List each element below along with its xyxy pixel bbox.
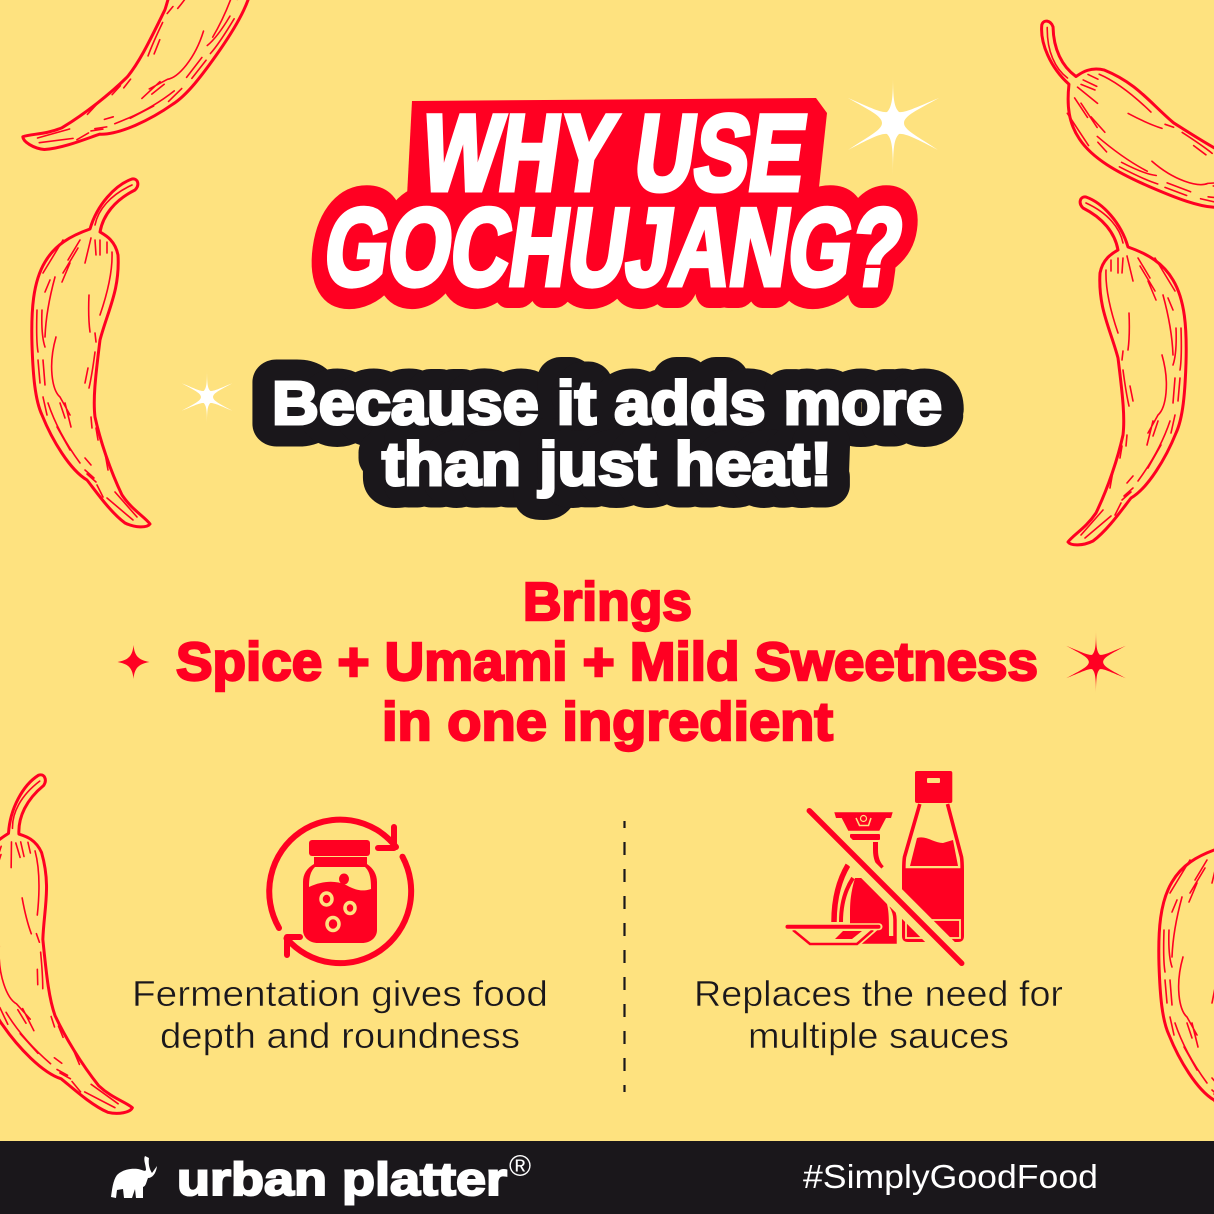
caption: fermentation: Fermentation gives food <box>132 973 548 1014</box>
chili: bottom right <box>1159 799 1214 1147</box>
icon: fermentation jar with cycle arrows <box>269 820 411 963</box>
caption: replaces sauces: multiple sauces <box>748 1015 1009 1056</box>
chili: middle right <box>1068 197 1186 545</box>
title: why use gochujang: WHY USE <box>415 92 814 213</box>
subtitle: because it adds more than just heat <box>272 369 942 498</box>
subtitle: because it adds more than just heat: than just heat! <box>382 430 832 498</box>
benefit statement: Brings <box>523 572 692 632</box>
footer bar <box>0 1141 1214 1214</box>
benefit statement: in one ingredient <box>382 692 833 752</box>
sparkle: red four-point <box>118 645 150 679</box>
chili: middle left <box>32 179 150 527</box>
title: why use gochujang <box>318 92 911 309</box>
icon: sauces crossed out <box>787 771 966 968</box>
sparkle: red six-point <box>1066 630 1126 694</box>
caption: fermentation <box>132 973 548 1056</box>
caption: fermentation: depth and roundness <box>160 1015 520 1056</box>
chili: bottom left <box>0 771 133 1137</box>
chili: top right <box>999 9 1214 265</box>
hashtag: #SimplyGoodFood <box>803 1158 1098 1195</box>
title: why use gochujang: GOCHUJANG? <box>318 186 911 309</box>
caption: replaces sauces: Replaces the need for <box>694 973 1063 1014</box>
brand name: urban platter <box>177 1153 507 1205</box>
subtitle: because it adds more than just heat: than just heat! <box>382 430 832 498</box>
divider <box>623 821 626 1092</box>
benefit statement: Spice + Umami + Mild Sweetness <box>176 632 1038 692</box>
sparkle: small white <box>182 370 232 424</box>
benefit statement <box>176 572 1038 752</box>
title: why use gochujang: GOCHUJANG? <box>318 186 911 309</box>
brand name: ® <box>509 1150 531 1183</box>
subtitle: because it adds more than just heat: Because it adds more <box>272 369 942 437</box>
sparkle: large white <box>848 76 939 175</box>
subtitle: because it adds more than just heat: Because it adds more <box>272 369 942 437</box>
chili: top left <box>21 0 310 204</box>
caption: replaces sauces <box>694 973 1063 1056</box>
icon: elephant logo <box>111 1156 157 1198</box>
